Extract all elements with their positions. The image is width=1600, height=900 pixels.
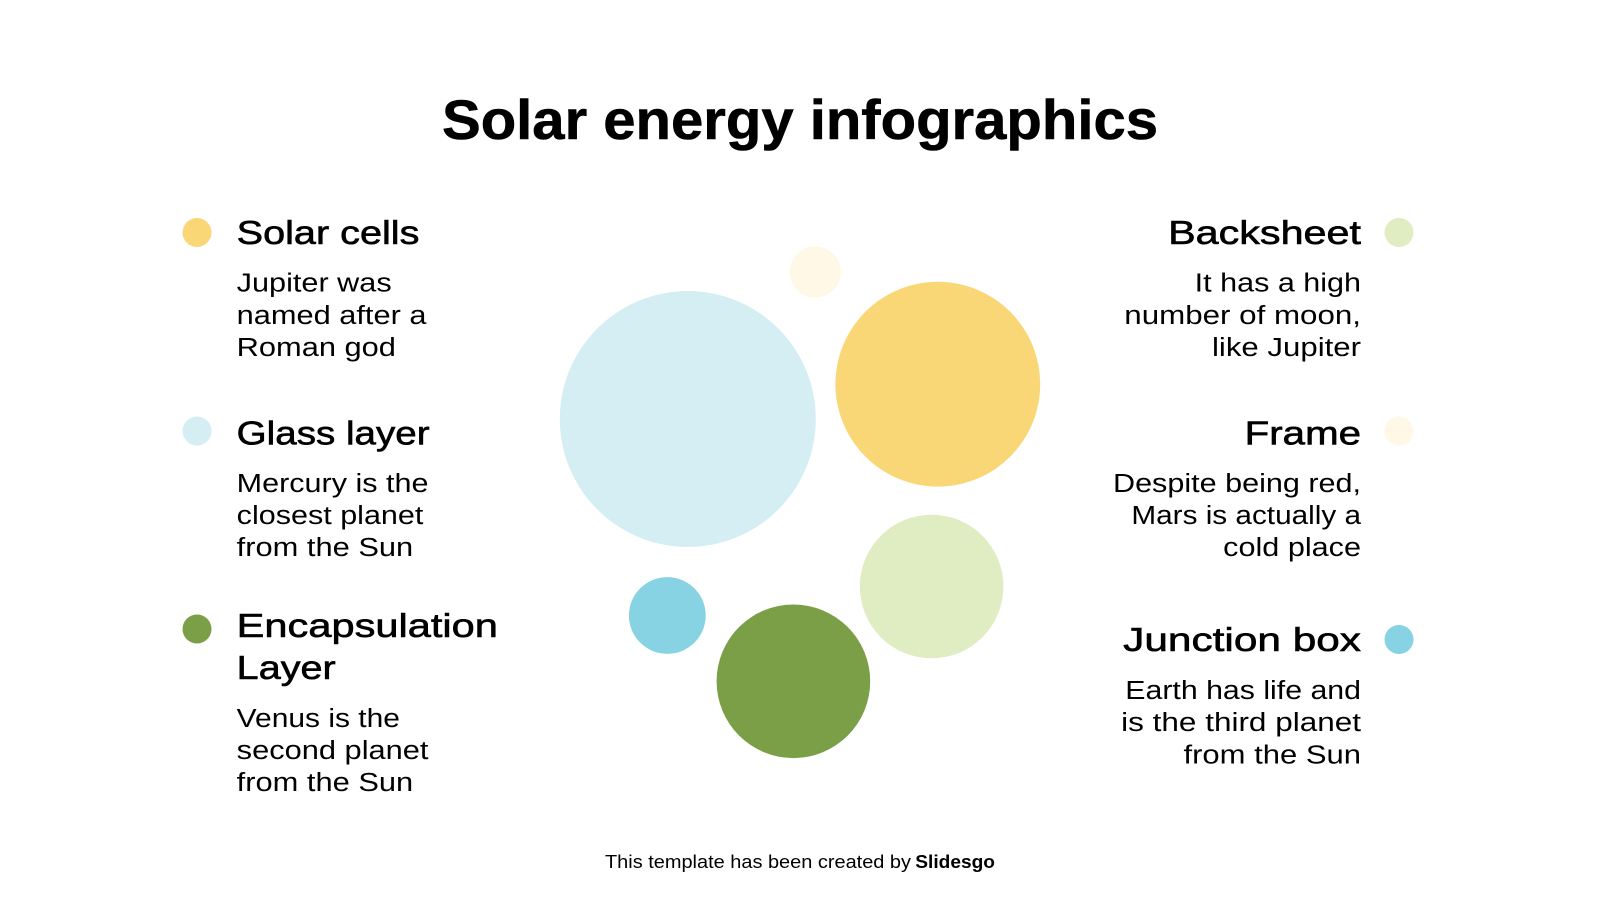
text block: glass layer [237,470,428,562]
text block: backsheet: It has a high [1195,270,1361,298]
panel: backsheet [1124,214,1414,362]
panel: encapsulation layer [182,607,498,797]
heading: frame: Frame [1245,414,1361,452]
panel: solar cells [182,214,427,362]
text block: junction box: Earth has life and [1125,677,1361,705]
text block: solar cells: named after a [237,302,427,330]
panel: junction box [1121,621,1414,769]
panel: frame [1113,414,1414,562]
text block: glass layer: from the Sun [237,534,413,562]
heading: encapsulation layer: Layer [237,649,336,686]
text block: encapsulation layer: Venus is the [237,705,400,733]
circle: frame [790,246,841,298]
text block: frame: Mars is actually a [1131,502,1362,530]
heading: encapsulation layer: Encapsulation [237,607,498,644]
text block: encapsulation layer: from the Sun [237,769,413,797]
text block: frame: cold place [1223,534,1361,562]
text block: junction box: is the third planet [1121,709,1361,737]
text block: junction box [1121,677,1361,769]
text block: frame [1113,470,1362,562]
circle: glass layer [560,291,816,547]
text block: encapsulation layer [237,705,428,797]
chart: solar panel layer circles [560,246,1040,758]
text block: junction box: from the Sun [1184,741,1361,769]
text block: frame: Despite being red, [1113,470,1361,498]
text block: glass layer: closest planet [237,502,423,530]
heading: backsheet: Backsheet [1168,214,1361,251]
icon: encapsulation layer dot [182,614,212,644]
text block: backsheet: like Jupiter [1212,334,1362,362]
panel: glass layer [182,414,430,562]
circle: backsheet [860,515,1003,658]
circle: junction box [629,577,706,654]
icon: backsheet dot [1384,218,1414,247]
heading: encapsulation layer [237,607,498,686]
footer credit: This template has been created by [605,851,912,872]
text block: solar cells: Roman god [237,334,396,362]
icon: frame dot [1384,416,1414,446]
heading: glass layer: Glass layer [237,414,430,452]
heading: junction box: Junction box [1123,621,1362,658]
heading: solar cells: Solar cells [237,214,419,251]
circle: encapsulation layer [717,604,870,758]
text block: backsheet [1124,270,1362,362]
circle: solar cells [835,282,1040,487]
text block: glass layer: Mercury is the [237,470,428,498]
text block: solar cells [237,270,427,362]
text block: encapsulation layer: second planet [237,737,428,765]
text block: backsheet: number of moon, [1124,302,1361,330]
text block: solar cells: Jupiter was [237,270,392,298]
footer credit: Slidesgo [915,851,995,872]
icon: glass layer dot [182,416,212,446]
icon: junction box dot [1384,625,1414,654]
icon: solar cells dot [182,218,212,247]
title: Solar energy infographics [442,88,1158,151]
